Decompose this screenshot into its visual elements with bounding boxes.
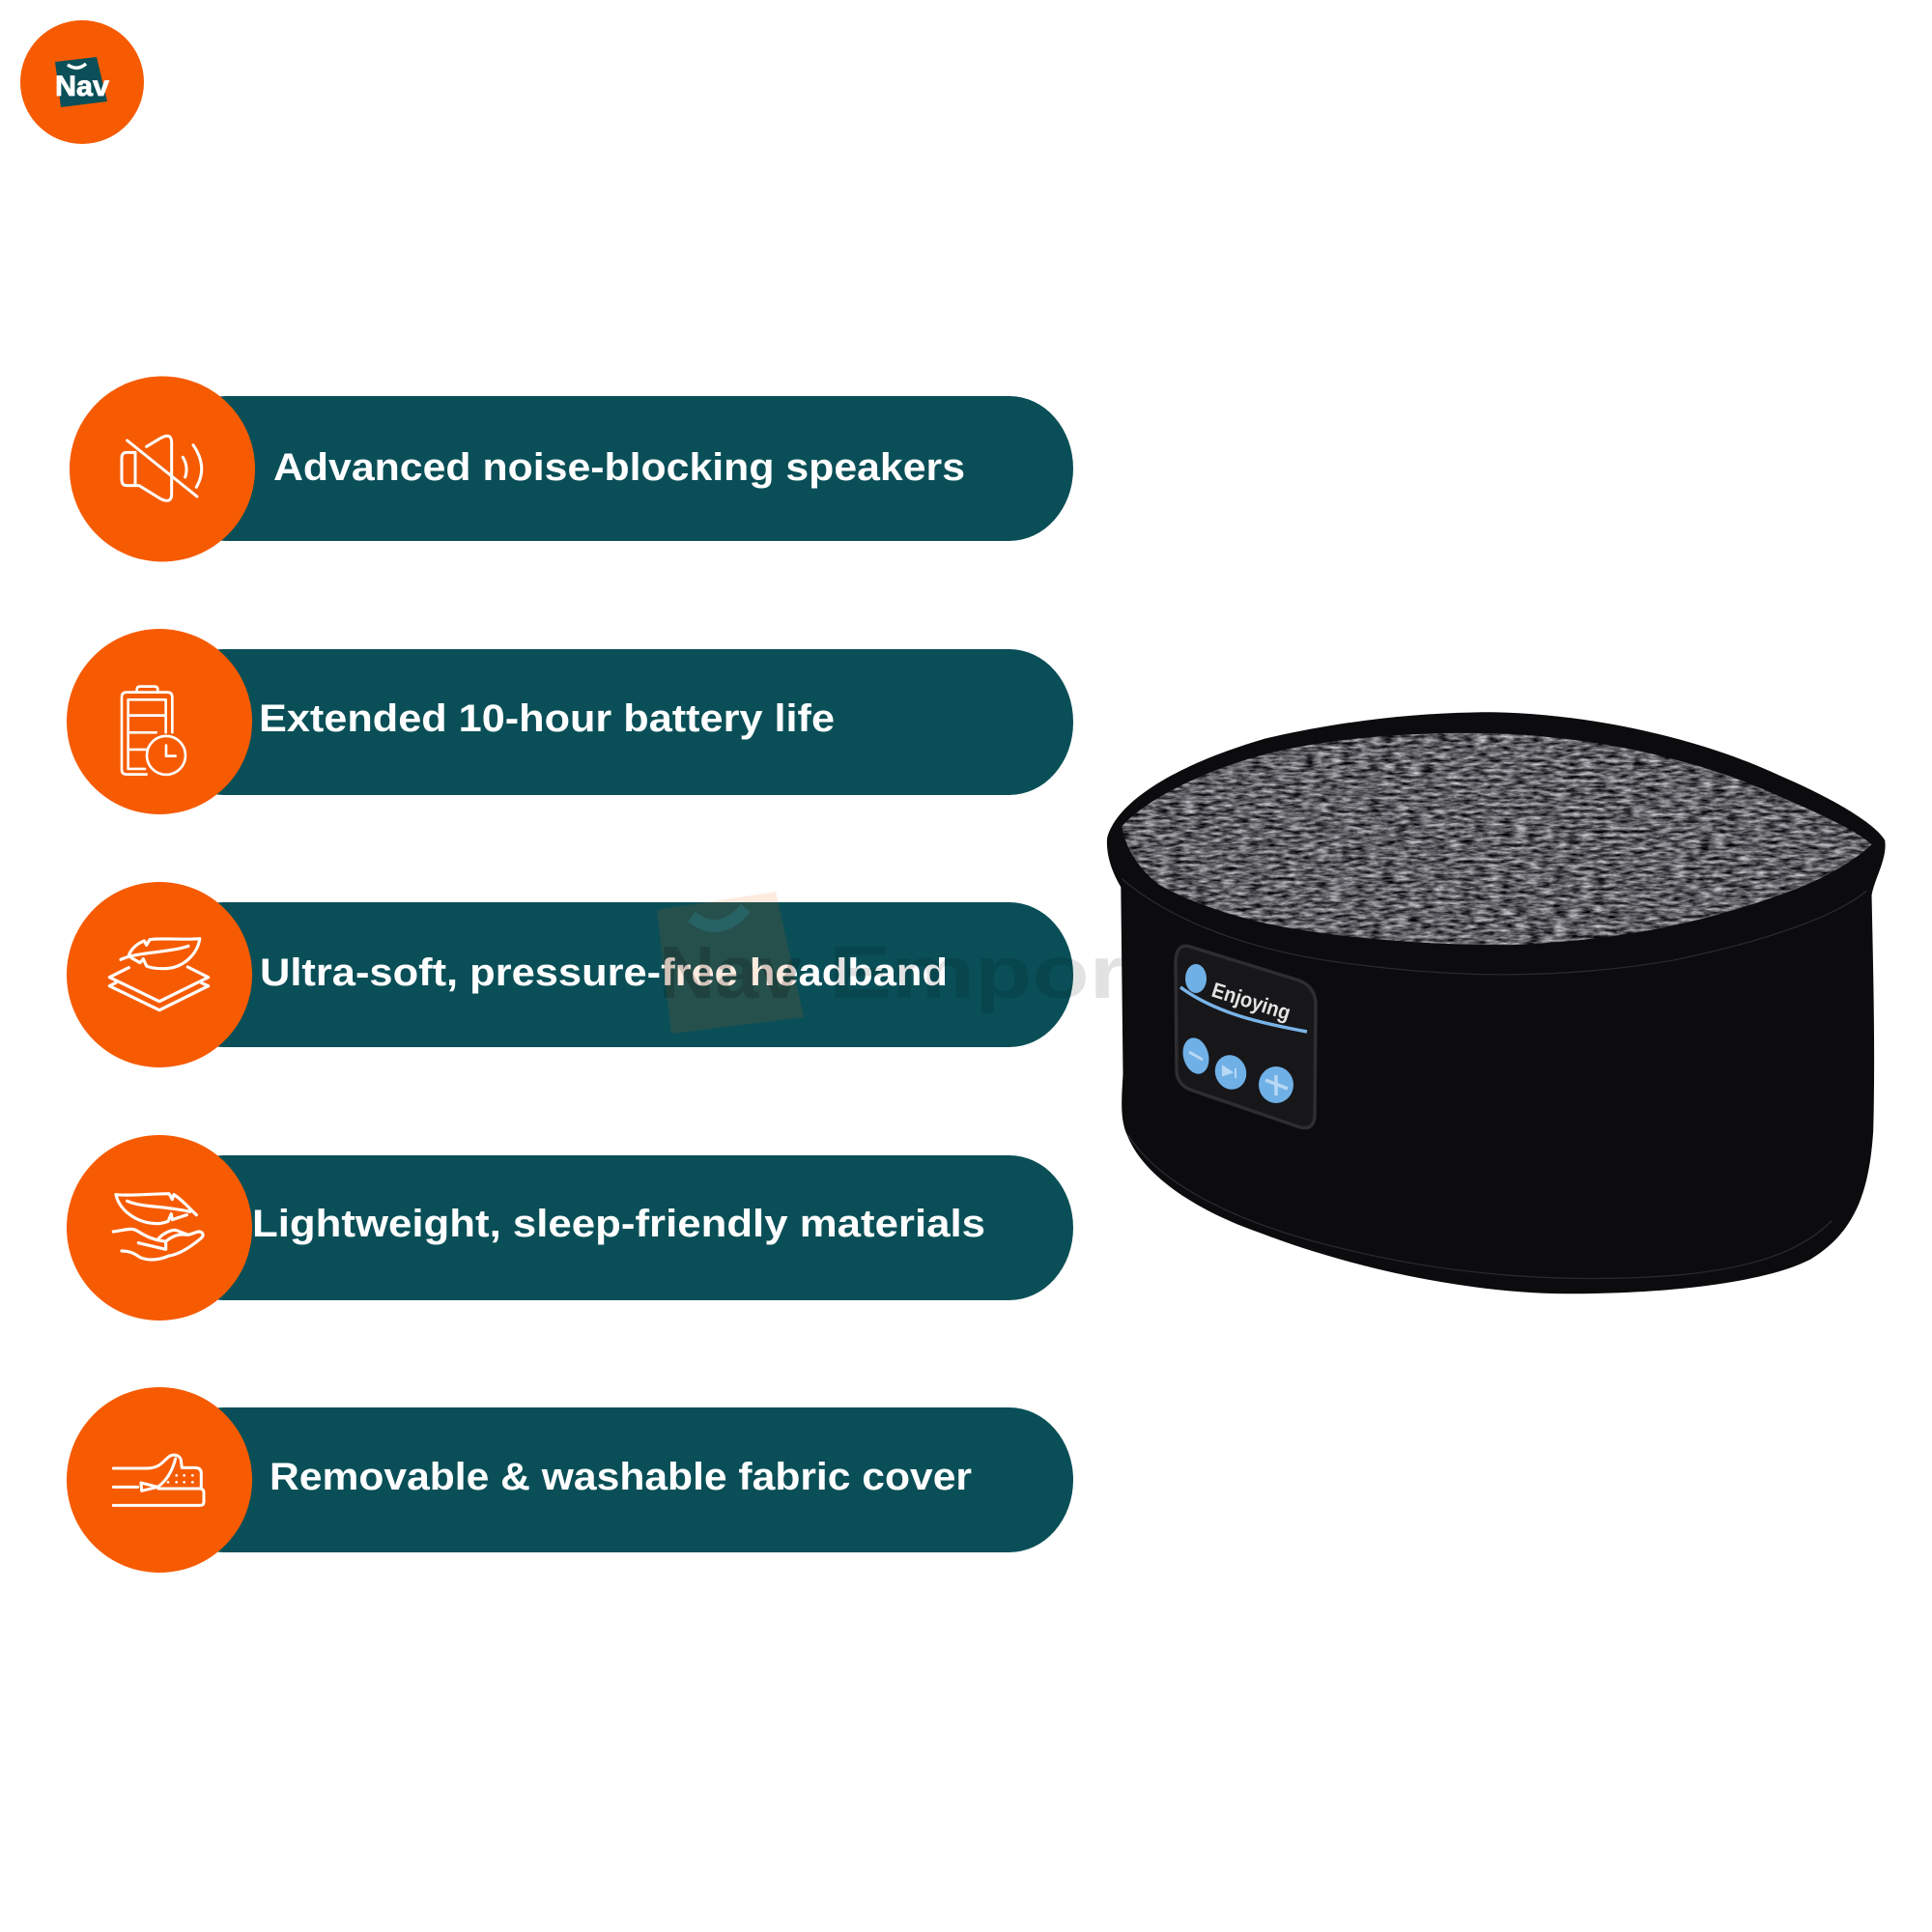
circle: battery life xyxy=(67,629,252,814)
circle: noise-blocking speakers xyxy=(70,377,255,562)
feature row: noise-blocking speakers xyxy=(70,377,1073,562)
hem seams xyxy=(1122,879,1866,1278)
control patch xyxy=(1176,946,1316,1128)
icon: zipped cushion cover xyxy=(113,1455,204,1505)
headband fabric xyxy=(1107,712,1886,1293)
pill: washable cover xyxy=(159,1407,1073,1552)
brand logo badge xyxy=(20,20,144,144)
heather grey inner lining xyxy=(1122,733,1872,945)
pill: noise-blocking speakers xyxy=(162,396,1073,541)
text: washable cover: Removable & washable fabric cover xyxy=(270,1456,972,1498)
note button xyxy=(1185,964,1207,993)
circle: lightweight materials xyxy=(67,1135,252,1321)
pill: battery life xyxy=(159,649,1073,795)
headband body xyxy=(1107,712,1886,1293)
watermark: Nav Emporium: Emporium xyxy=(829,931,1293,1014)
watermark: Nav Emporium xyxy=(657,892,1293,1034)
icon: muted speaker xyxy=(122,436,202,500)
watermark: Nav Emporium: Nav xyxy=(659,931,802,1014)
plus button xyxy=(1259,1066,1293,1103)
text: lightweight materials: Lightweight, sleep-friendly materials xyxy=(252,1203,985,1245)
feature row: lightweight materials xyxy=(67,1135,1073,1321)
circle: soft headband xyxy=(67,882,252,1067)
feature row: soft headband xyxy=(67,882,1073,1067)
icon: feather over hand xyxy=(113,1194,203,1260)
circle: washable cover xyxy=(67,1387,252,1573)
icon: feather over layers xyxy=(109,939,209,1010)
text: soft headband: Ultra-soft, pressure-free headband xyxy=(260,952,948,994)
pill: soft headband xyxy=(159,902,1073,1047)
text: battery life: Extended 10-hour battery life xyxy=(259,697,835,740)
icon: battery with clock xyxy=(122,687,185,775)
play button xyxy=(1210,1051,1251,1094)
text: noise-blocking speakers: Advanced noise-blocking speakers xyxy=(273,446,965,489)
feature row: washable cover xyxy=(67,1387,1073,1573)
pill: lightweight materials xyxy=(159,1155,1073,1300)
patch label: Enjoying xyxy=(1208,978,1293,1025)
feature row: battery life xyxy=(67,629,1073,814)
blue divider line xyxy=(1180,987,1307,1032)
brand logo badge: Nav xyxy=(55,71,109,102)
product photo: sleep headband xyxy=(1107,712,1886,1293)
minus button xyxy=(1179,1035,1212,1077)
